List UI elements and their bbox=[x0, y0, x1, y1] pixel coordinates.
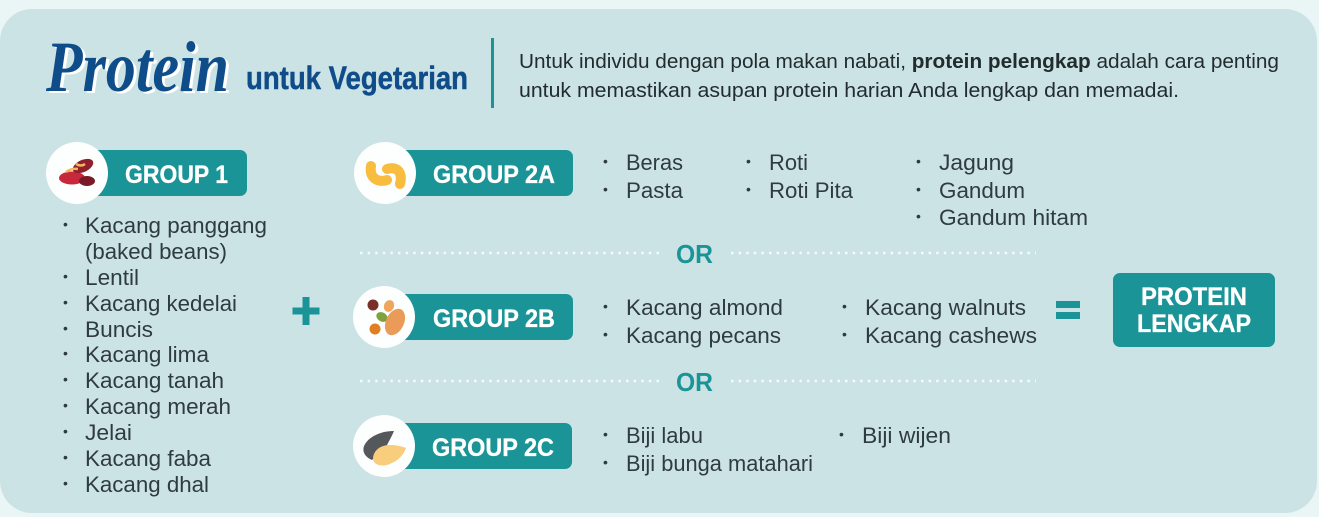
group 2A list: • bbox=[916, 181, 921, 197]
result box: protein lengkap: LENGKAP bbox=[1137, 310, 1251, 338]
group 1 list: Kacang panggang bbox=[85, 213, 267, 238]
group 1 list bbox=[63, 213, 267, 497]
group 1 list: • bbox=[63, 345, 68, 361]
group 2C list: Biji labu bbox=[626, 423, 703, 448]
title: untuk Vegetarian bbox=[246, 60, 468, 96]
group 1 list: • bbox=[63, 397, 68, 413]
OR divider 2: OR bbox=[676, 367, 713, 397]
group 2A list: • bbox=[603, 153, 608, 169]
group 2A list: Roti Pita bbox=[769, 178, 854, 203]
group 2B badge bbox=[353, 286, 573, 348]
group 2A list: Roti bbox=[769, 150, 808, 175]
group 2C badge bbox=[353, 415, 572, 477]
icon: beans bbox=[59, 156, 96, 186]
group 2B badge: GROUP 2B bbox=[433, 305, 555, 333]
group 2A list: • bbox=[746, 153, 751, 169]
intro text: untuk memastikan asupan protein harian Anda lengkap dan memadai. bbox=[519, 79, 1179, 102]
group 1 list: • bbox=[63, 449, 68, 465]
group 1 list: Kacang faba bbox=[85, 446, 212, 471]
group 2A list: Beras bbox=[626, 150, 683, 175]
group 2B list: Kacang cashews bbox=[865, 323, 1037, 348]
group 1 list: • bbox=[63, 268, 68, 284]
group 2C list bbox=[603, 423, 951, 476]
group 2B list: Kacang walnuts bbox=[865, 295, 1026, 320]
group 2C list: • bbox=[603, 454, 608, 470]
group 1 list: Lentil bbox=[85, 265, 139, 290]
title: Protein bbox=[48, 29, 232, 109]
group 2A list: • bbox=[603, 181, 608, 197]
group 1 list: Jelai bbox=[85, 420, 132, 445]
group 2A list: • bbox=[746, 181, 751, 197]
group 2B list: Kacang almond bbox=[626, 295, 783, 320]
group 1 list: • bbox=[63, 294, 68, 310]
intro text bbox=[519, 50, 1279, 102]
group 2B list: • bbox=[603, 298, 608, 314]
group 2A list: Pasta bbox=[626, 178, 684, 203]
group 2A list: Gandum hitam bbox=[939, 205, 1088, 230]
group 1 list: (baked beans) bbox=[85, 239, 227, 264]
group 1 list: Kacang dhal bbox=[85, 472, 209, 497]
icon: macaroni bbox=[371, 166, 401, 184]
group 2A badge bbox=[354, 142, 573, 204]
icon: seeds bbox=[363, 431, 406, 466]
group 2C list: • bbox=[603, 426, 608, 442]
group 1 badge bbox=[46, 142, 247, 204]
title bbox=[45, 27, 468, 109]
group 1 badge: GROUP 1 bbox=[125, 161, 228, 189]
OR divider 1: OR bbox=[676, 239, 713, 269]
group 1 list: Kacang tanah bbox=[85, 368, 224, 393]
group 1 list: Kacang kedelai bbox=[85, 291, 237, 316]
group 1 list: • bbox=[63, 320, 68, 336]
group 1 list: • bbox=[63, 371, 68, 387]
group 2A list bbox=[603, 150, 1088, 230]
group 1 list: Buncis bbox=[85, 317, 153, 342]
equals sign bbox=[1056, 301, 1080, 319]
title: Protein bbox=[45, 27, 229, 107]
group 2A list: Gandum bbox=[939, 178, 1025, 203]
group 2B list bbox=[603, 295, 1037, 348]
group 2C list: Biji wijen bbox=[862, 423, 951, 448]
group 2C badge: GROUP 2C bbox=[432, 434, 554, 462]
group 1 list: • bbox=[63, 216, 68, 232]
plus sign bbox=[292, 297, 320, 325]
icon: nuts bbox=[368, 298, 409, 338]
group 2B list: • bbox=[842, 326, 847, 342]
group 1 list: • bbox=[63, 423, 68, 439]
group 2A list: • bbox=[916, 153, 921, 169]
group 2A list: • bbox=[916, 208, 921, 224]
group 2A badge: GROUP 2A bbox=[433, 161, 555, 189]
group 2C list: Biji bunga matahari bbox=[626, 451, 813, 476]
group 2B list: Kacang pecans bbox=[626, 323, 781, 348]
group 2B list: • bbox=[842, 298, 847, 314]
group 1 list: Kacang merah bbox=[85, 394, 231, 419]
result box: protein lengkap bbox=[1113, 273, 1275, 347]
group 1 list: • bbox=[63, 475, 68, 491]
group 2A list: Jagung bbox=[939, 150, 1014, 175]
group 2B list: • bbox=[603, 326, 608, 342]
intro text: Untuk individu dengan pola makan nabati, protein pelengkap adalah cara penting bbox=[519, 50, 1279, 73]
group 2C list: • bbox=[839, 426, 844, 442]
result box: protein lengkap: PROTEIN bbox=[1141, 283, 1247, 311]
group 1 list: Kacang lima bbox=[85, 342, 210, 367]
